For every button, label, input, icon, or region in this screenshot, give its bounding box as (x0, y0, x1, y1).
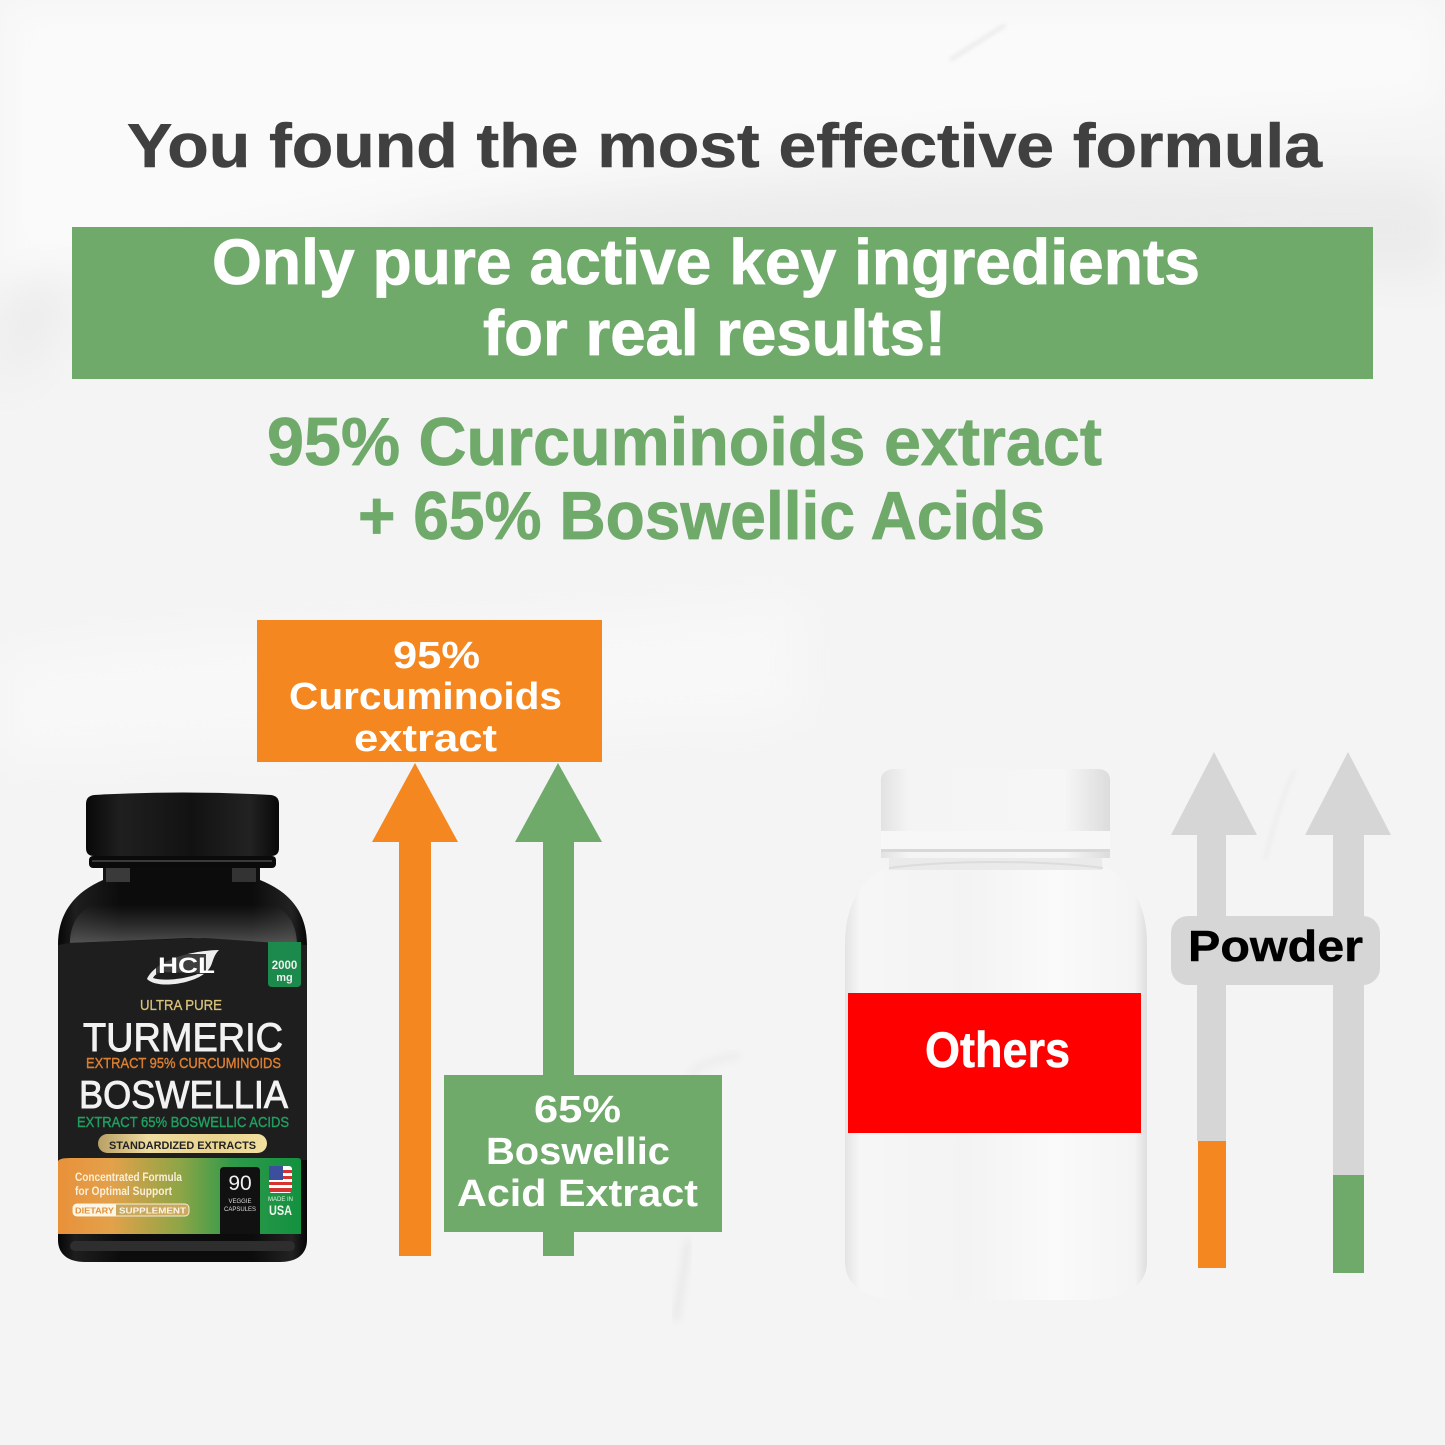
white bottle body (845, 866, 1147, 1300)
callout: 95% curcuminoids extract: Curcuminoids (289, 676, 562, 718)
callout: 95% curcuminoids extract: extract (354, 718, 497, 760)
brand logo: HCL (158, 953, 215, 978)
dose badge (268, 942, 301, 987)
icon: grey arrow two with green fill (1305, 752, 1391, 1273)
icon: us flag and made in usa (268, 1166, 293, 1218)
standardized extracts pill (98, 1134, 267, 1153)
icon: grey arrow one with orange fill (1171, 752, 1257, 1268)
red label: others: Others (925, 1022, 1070, 1078)
gradient footer band: SUPPLEMENT (119, 1206, 187, 1216)
product name text (77, 997, 289, 1131)
bottle cap (86, 792, 279, 868)
banner: only pure active key ingredients: Only pure active key ingredients (212, 226, 1200, 298)
dose badge: mg (276, 972, 293, 984)
banner: only pure active key ingredients (72, 226, 1373, 379)
product name text: ULTRA PURE (140, 997, 222, 1014)
label: powder (1171, 916, 1380, 985)
competitor white bottle (845, 769, 1147, 1300)
subheading: extract percentages (267, 404, 1102, 554)
subheading: extract percentages: + 65% Boswellic Acids (358, 478, 1045, 554)
brand logo (147, 950, 219, 985)
standardized extracts pill: STANDARDIZED EXTRACTS (109, 1140, 256, 1152)
bottle highlights (70, 868, 297, 1251)
gradient footer band: DIETARY (75, 1206, 114, 1216)
capsule count box: CAPSULES (224, 1207, 256, 1213)
gradient footer band: Concentrated Formula (75, 1172, 183, 1184)
icon: green arrow, tall (515, 763, 602, 1256)
callout: 65% boswellic acid extract: Boswellic (486, 1131, 670, 1173)
icon: us flag and made in usa: USA (269, 1202, 292, 1218)
callout: 65% boswellic acid extract: Acid Extract (457, 1173, 698, 1215)
gradient footer band (58, 1158, 301, 1234)
banner: only pure active key ingredients: for real results! (483, 297, 946, 369)
capsule count box: VEGGIE (228, 1199, 252, 1205)
label: powder: Powder (1188, 922, 1363, 971)
product name text: BOSWELLIA (79, 1074, 288, 1117)
product name text: EXTRACT 65% BOSWELLIC ACIDS (77, 1115, 289, 1131)
white bottle cap (881, 769, 1110, 870)
title: You found the most effective formula (127, 112, 1323, 181)
product name text: EXTRACT 95% CURCUMINOIDS (86, 1056, 281, 1072)
bottle body (58, 862, 307, 1262)
label panel (58, 938, 307, 1160)
callout: 95% curcuminoids extract: 95% (393, 635, 480, 677)
callout: 65% boswellic acid extract (444, 1075, 722, 1232)
product name text: TURMERIC (83, 1016, 283, 1060)
gradient footer band: for Optimal Support (75, 1186, 172, 1198)
icon: us flag and made in usa: MADE IN (268, 1197, 293, 1203)
callout: 95% curcuminoids extract (257, 620, 602, 762)
subheading: extract percentages: 95% Curcuminoids extract (267, 404, 1102, 480)
dose badge: 2000 (272, 960, 297, 972)
capsule count box: 90 (228, 1172, 252, 1195)
product bottle: HCL turmeric boswellia (58, 792, 307, 1262)
capsule count box (220, 1167, 260, 1234)
icon: orange arrow, tall (372, 763, 458, 1256)
callout: 65% boswellic acid extract: 65% (534, 1089, 621, 1131)
red label: others (848, 993, 1141, 1133)
